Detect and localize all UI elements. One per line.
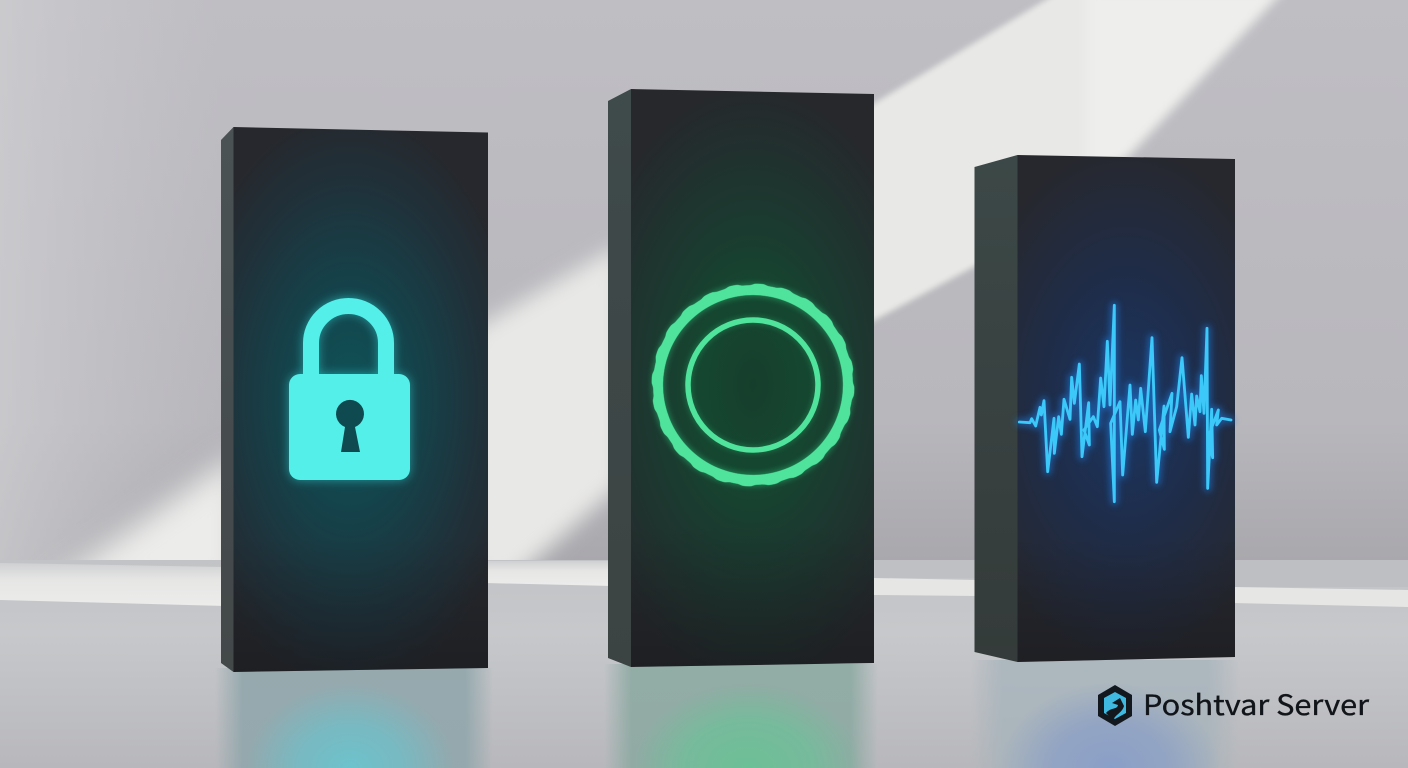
floor reflection: lock block teal xyxy=(215,668,493,768)
face bottom shading xyxy=(234,127,488,672)
block side face xyxy=(974,155,1018,662)
logo: Poshtvar Server xyxy=(1098,684,1369,726)
panel: right block with waveform xyxy=(974,155,1235,662)
icon: padlock xyxy=(289,305,410,480)
floor xyxy=(0,560,1408,768)
block side face xyxy=(221,127,234,672)
wall background xyxy=(0,0,1408,562)
panel: left block with lock xyxy=(221,127,488,672)
block front face xyxy=(234,127,488,672)
floor reflection: ring block green xyxy=(604,664,878,768)
brand name: Poshtvar Server xyxy=(1143,684,1369,724)
keyhole xyxy=(336,400,364,452)
face bottom shading xyxy=(1018,155,1235,662)
block side face xyxy=(608,89,631,667)
icon: concentric rings xyxy=(655,287,851,483)
floor reflection: waveform block blue xyxy=(970,660,1240,768)
icon: audio waveform xyxy=(1019,305,1231,502)
window light bands on wall xyxy=(45,0,1284,590)
icon: hexagon mark xyxy=(1098,685,1132,726)
panel: middle block with ring xyxy=(608,89,874,667)
block front face xyxy=(1018,155,1235,662)
face bottom shading xyxy=(631,89,874,667)
block front face xyxy=(631,89,874,667)
